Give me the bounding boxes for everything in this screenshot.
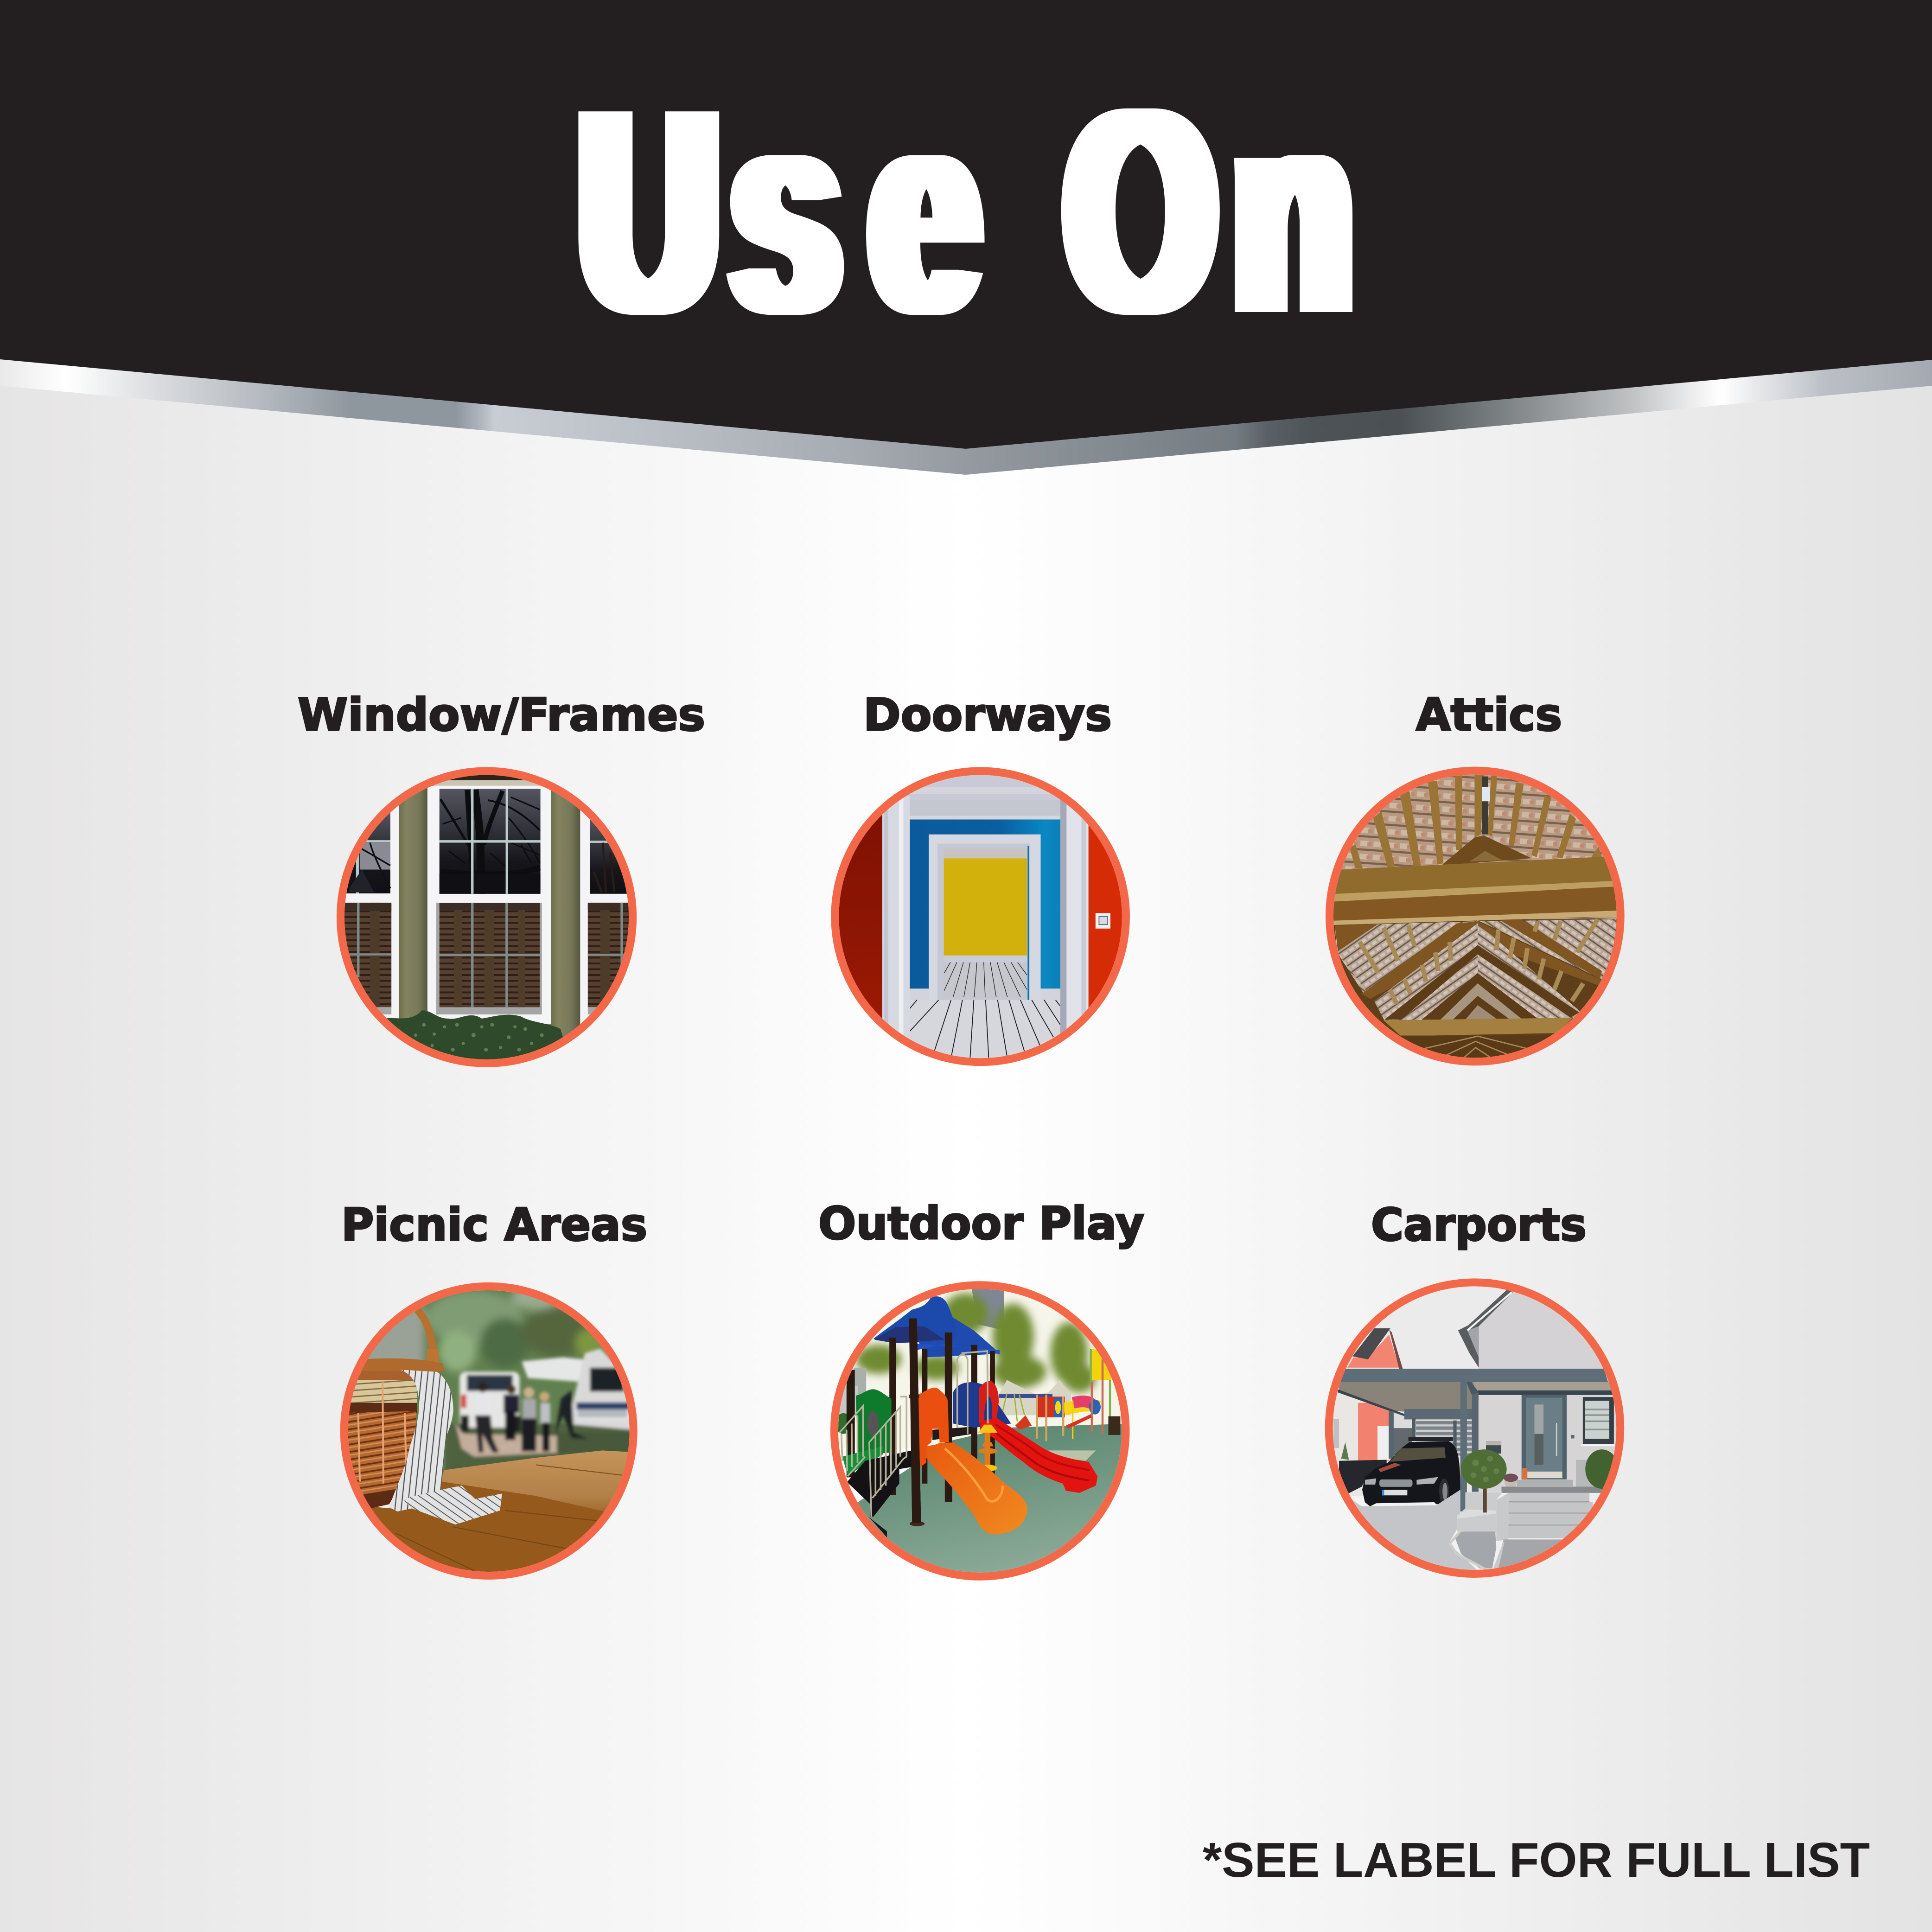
panel: attics (1325, 689, 1625, 1069)
tree (1461, 1449, 1507, 1489)
window (1583, 1397, 1614, 1444)
panel: doorways (833, 689, 1133, 1069)
far play equipment (1036, 1396, 1065, 1417)
towel (389, 1370, 502, 1524)
heading: carports: Carports (1371, 1199, 1587, 1251)
icon ring (344, 1286, 633, 1575)
heading: doorways: Doorways (863, 689, 1112, 741)
panel: carports (1325, 1199, 1625, 1577)
mailbox (1486, 1441, 1501, 1454)
green panel (856, 1389, 892, 1457)
icon ring (340, 771, 633, 1063)
heading: outdoor play: Outdoor Play (818, 1198, 1144, 1250)
header banner (0, 0, 1932, 449)
blue tube (953, 1382, 1011, 1428)
photo: carport house (1325, 1279, 1625, 1577)
photo: doorway (833, 768, 1133, 1069)
bottom chevrons (1325, 1036, 1625, 1069)
panel: outdoor play (818, 1198, 1144, 1581)
people (477, 1392, 489, 1417)
rear dark post (847, 1370, 855, 1477)
right bush (1576, 1460, 1594, 1486)
red panel + slide (979, 1381, 999, 1423)
van (459, 1372, 520, 1428)
rail left (839, 1351, 988, 1517)
roofs (917, 1318, 1000, 1357)
soffit (1339, 1382, 1476, 1415)
steps (1501, 1486, 1603, 1493)
center window (427, 786, 551, 1024)
bush (384, 1010, 573, 1071)
camper (573, 1349, 633, 1430)
inner door frame (929, 835, 1041, 1000)
ground (833, 1423, 1131, 1581)
beam 3 (1384, 1018, 1573, 1036)
stairs (848, 1450, 912, 1517)
grey house (1479, 1283, 1623, 1370)
beam 1 (1333, 856, 1616, 902)
background building (999, 1380, 1071, 1415)
photo: picnic basket (342, 1283, 642, 1585)
icon ring (1329, 771, 1620, 1062)
icon ring (1329, 1282, 1620, 1574)
heading: attics: Attics (1416, 689, 1562, 741)
icon ring (835, 771, 1126, 1062)
orange slide (926, 1442, 1027, 1535)
outer casings (882, 796, 910, 1069)
door (1522, 1395, 1567, 1479)
right window (580, 810, 629, 1024)
table (342, 1450, 640, 1585)
tents (522, 1357, 584, 1382)
beam (1339, 1369, 1608, 1382)
fence (1339, 1460, 1387, 1493)
car (1362, 1441, 1460, 1506)
icon ring (834, 1285, 1126, 1576)
panel: window/frames (298, 689, 705, 1071)
panel: picnic areas (341, 1199, 647, 1585)
switch (1096, 913, 1110, 929)
grass + path (445, 1423, 631, 1473)
left window (344, 805, 399, 1021)
basket (417, 1310, 435, 1361)
chrome band under header (0, 359, 1932, 475)
posts (889, 1319, 995, 1523)
footnote: *SEE LABEL FOR FULL LIST (1203, 1833, 1870, 1887)
building and trees (972, 1289, 1004, 1330)
photo: attic beams (1325, 768, 1625, 1069)
gravel (1455, 1531, 1496, 1569)
lower section (1325, 919, 1625, 1068)
title: Use On (580, 49, 1351, 374)
beam 2 (1333, 886, 1619, 921)
heading: window/frames: Window/Frames (298, 689, 705, 741)
heading: picnic areas: Picnic Areas (341, 1199, 647, 1251)
pink house (1347, 1334, 1399, 1368)
lower wall behind (1331, 1392, 1480, 1496)
yellow pole (978, 1425, 998, 1433)
posts (1389, 1411, 1394, 1459)
planter (1457, 1492, 1503, 1533)
photo: playground (833, 1283, 1133, 1581)
facade (1479, 1392, 1624, 1492)
platform (932, 1427, 974, 1440)
pavement (1343, 1490, 1478, 1577)
pot and cat (1504, 1480, 1517, 1486)
orange panel (918, 1388, 949, 1467)
photo: windows (337, 768, 642, 1071)
